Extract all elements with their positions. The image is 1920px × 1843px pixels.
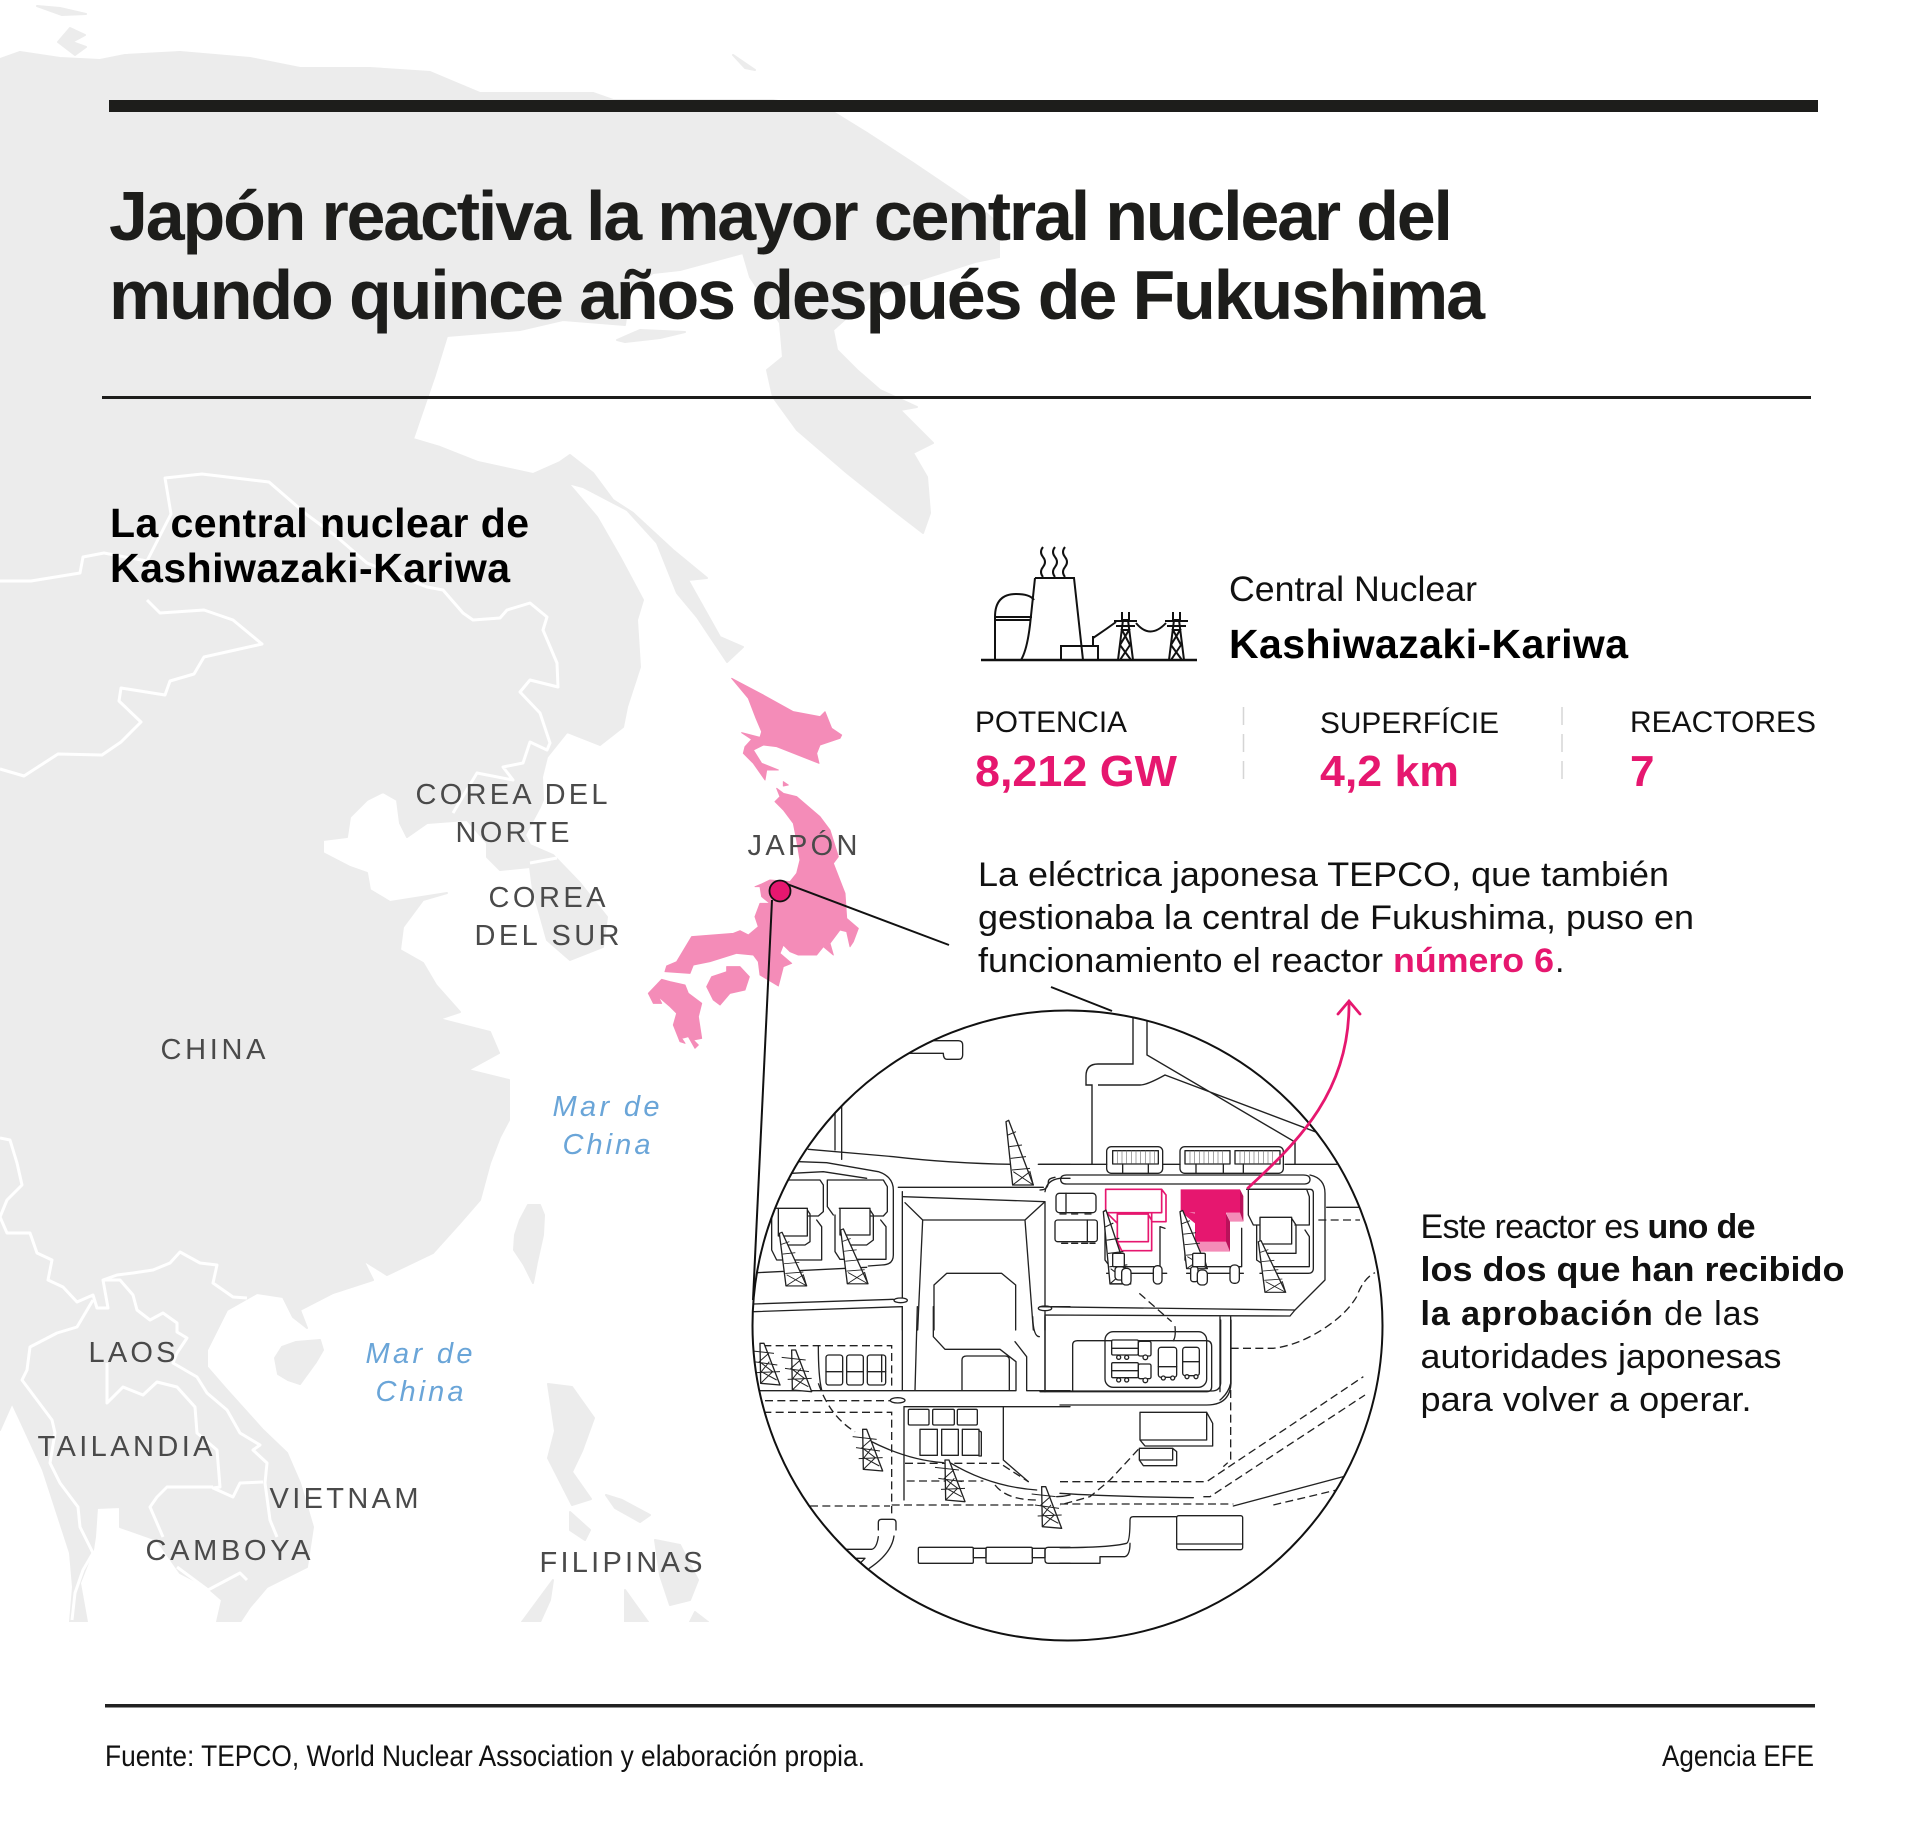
top thick rule [109, 100, 1818, 112]
text block: approval: autoridades japonesas [1420, 1338, 1782, 1376]
text block: TEPCO: La eléctrica japonesa TEPCO, que también [978, 856, 1669, 894]
rule under title [102, 396, 1811, 399]
map labels: countries: CHINA [160, 1034, 266, 1066]
map labels: seas: China [376, 1376, 464, 1408]
text block: TEPCO [978, 856, 1694, 980]
text block: approval: para volver a operar. [1420, 1381, 1752, 1419]
plant name [1229, 570, 1629, 667]
map labels: countries: TAILANDIA [38, 1431, 213, 1463]
text block: TEPCO: funcionamiento el reactor [978, 942, 1383, 980]
text block: approval: la aprobación de las [1420, 1295, 1760, 1333]
text block: approval: los dos que han recibido [1420, 1251, 1844, 1289]
title: Japón reactiva la mayor central nuclear del [109, 177, 1453, 255]
map labels: countries: CAMBOYA [146, 1535, 311, 1567]
title: mundo quince años después de Fukushima [109, 256, 1486, 334]
stat: potencia: 8,212 GW [975, 747, 1177, 796]
text block: approval: Este reactor es uno de [1420, 1208, 1756, 1246]
plant name: Kashiwazaki-Kariwa [1229, 621, 1629, 667]
map labels: countries: FILIPINAS [540, 1547, 702, 1579]
map labels: seas: Mar de [366, 1338, 472, 1370]
text block: approval [1420, 1208, 1844, 1419]
text block: TEPCO: número 6 [1393, 942, 1554, 980]
stat: reactores: 7 [1630, 747, 1654, 796]
circle: plant site plan [750, 1010, 1382, 1640]
map labels: countries: COREA [488, 882, 606, 914]
map labels: countries: COREA DEL [416, 779, 608, 811]
title [109, 177, 1486, 334]
map labels: seas [366, 1091, 660, 1408]
icon: nuclear power plant [981, 547, 1197, 660]
location marker: Kashiwazaki-Kariwa [770, 880, 790, 902]
stat: reactores [1630, 706, 1816, 796]
stat: superficie: SUPERFÍCIE [1320, 707, 1499, 740]
subtitle [110, 500, 529, 591]
stat: superficie: 4,2 km [1320, 747, 1459, 796]
map: grey land of East Asia [0, 6, 1028, 1622]
stat: potencia [975, 706, 1177, 796]
map labels: countries [38, 779, 858, 1579]
subtitle: La central nuclear de [110, 500, 529, 546]
arrow: pink pointer to reactor 6 [1248, 1001, 1360, 1188]
zoom lines from Japan marker to circle [753, 884, 1112, 1300]
map labels: countries: JAPÓN [748, 829, 858, 862]
subtitle: Kashiwazaki-Kariwa [110, 545, 511, 591]
stat: potencia: POTENCIA [975, 706, 1127, 739]
bottom rule [105, 1704, 1815, 1708]
map labels: seas: Mar de [552, 1091, 660, 1123]
text block: TEPCO: gestionaba la central de Fukushima, puso en [978, 899, 1694, 937]
map labels: countries: DEL SUR [474, 920, 620, 952]
stat: superficie [1320, 707, 1499, 796]
map labels: seas: China [562, 1129, 650, 1161]
map labels: countries: NORTE [456, 817, 570, 849]
map labels: countries: LAOS [88, 1337, 176, 1369]
credit: Agencia EFE [1662, 1740, 1814, 1773]
plant name: Central Nuclear [1229, 570, 1477, 609]
map: Japan highlighted in pink [648, 678, 858, 1048]
map labels: countries: VIETNAM [270, 1483, 418, 1515]
text block: TEPCO: . [1555, 942, 1564, 980]
source: Fuente: TEPCO, World Nuclear Association y elaboración propia. [105, 1740, 865, 1773]
stat: reactores: REACTORES [1630, 706, 1816, 739]
